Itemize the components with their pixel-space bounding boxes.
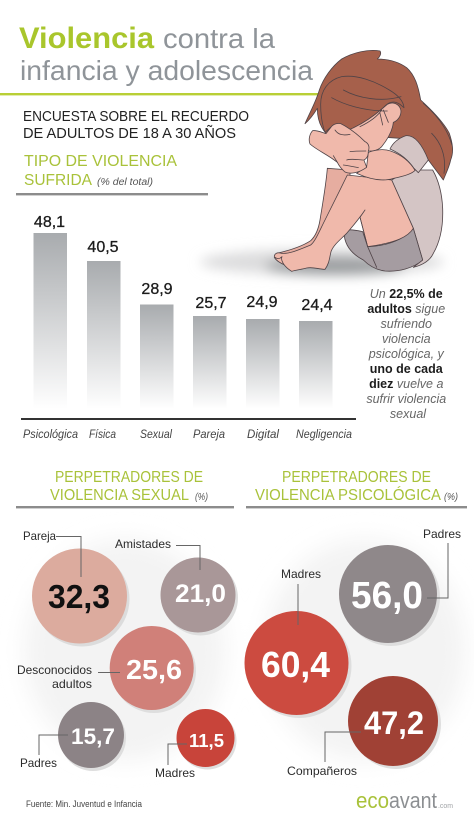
bar: Digital: Digital <box>247 427 279 441</box>
bar chart <box>23 214 352 441</box>
bar: Física: 40,5 <box>87 239 119 256</box>
bubble chart: violencia sexual <box>17 529 238 780</box>
heading: violencia sexual: PERPETRADORES DE <box>55 469 203 486</box>
callout: sufriendo <box>381 317 432 331</box>
bar: Pareja: 25,7 <box>195 295 227 312</box>
hand creases <box>333 130 366 168</box>
logo: ecoavant: avant <box>389 788 437 813</box>
title: contra la <box>163 23 275 54</box>
bar: Digital <box>246 294 280 441</box>
bubble: Madres <box>244 567 352 718</box>
title: infancia y adolescencia <box>20 55 313 86</box>
bar: Digital: 24,9 <box>246 294 278 311</box>
callout: psicológica, y <box>368 347 445 361</box>
callout: violencia <box>382 332 431 346</box>
heading: violencia sexual <box>50 469 208 504</box>
face <box>348 103 401 151</box>
bubble: Padres: 15,7 <box>71 724 115 749</box>
heading: violencia sexual: VIOLENCIA SEXUAL <box>50 487 189 504</box>
bubble: Padres <box>339 527 461 646</box>
bar: Psicológica: 48,1 <box>34 214 65 231</box>
heading: tipo de violencia: (% del total) <box>97 177 153 188</box>
bar: Negligencia: Negligencia <box>296 427 352 441</box>
bar: Física: Física <box>89 427 116 441</box>
fringe <box>321 76 404 132</box>
bubble chart: violencia psicológica <box>244 527 461 778</box>
shorts <box>344 228 423 271</box>
bar: Psicológica <box>23 214 78 441</box>
logo: ecoavant: .com <box>438 803 453 810</box>
far leg <box>277 168 350 260</box>
heading rule <box>16 506 234 508</box>
bubble: Madres: Madres <box>155 766 195 780</box>
heading: tipo de violencia: SUFRIDA <box>24 172 92 189</box>
bar: Sexual: 28,9 <box>141 281 173 298</box>
bubble: Compañeros: 47,2 <box>364 705 424 741</box>
bar: Sexual: Sexual <box>140 427 172 441</box>
callout: diez vuelve a <box>369 377 443 391</box>
hair strands <box>332 90 452 173</box>
logo: ecoavant: eco <box>356 788 389 813</box>
bubble: Pareja: Pareja <box>23 529 56 543</box>
bar: Negligencia <box>296 297 352 441</box>
soft backdrop <box>25 540 465 760</box>
lower body <box>274 168 443 271</box>
heading: tipo de violencia <box>24 153 177 189</box>
heading: violencia psicológica: VIOLENCIA PSICOLÓGICA <box>255 485 441 504</box>
title rule <box>0 93 318 95</box>
bubble: Pareja <box>23 529 130 646</box>
illustration: seated girl <box>274 50 453 271</box>
left arm and hand <box>309 123 369 173</box>
heading: violencia psicológica: PERPETRADORES DE <box>282 469 431 486</box>
hair back <box>305 50 453 180</box>
bubble: Compañeros <box>287 676 441 778</box>
bubble: Padres: 56,0 <box>351 575 423 617</box>
bubble: Desconocidos adultos: 25,6 <box>126 654 182 685</box>
bubble: Compañeros: Compañeros <box>287 764 357 778</box>
bubble: Amistades: 21,0 <box>175 580 226 608</box>
bubble: Padres: Padres <box>423 527 461 541</box>
heading: violencia psicológica: (%) <box>444 492 458 503</box>
bar: Física <box>87 239 120 441</box>
heading: violencia psicológica <box>255 469 458 504</box>
bar: Sexual <box>140 281 174 441</box>
bubble: Desconocidos adultos <box>17 626 196 713</box>
callout: sufrir violencia <box>366 392 446 406</box>
bar: Psicológica: Psicológica <box>23 427 78 441</box>
source: Fuente: Min. Juventud e Infancia <box>26 799 142 809</box>
bubble: Amistades <box>115 537 238 636</box>
floor shadow <box>200 249 444 275</box>
bar: Pareja: Pareja <box>193 427 225 441</box>
title <box>19 22 313 86</box>
right arm <box>357 150 415 180</box>
chart axis <box>21 418 356 420</box>
bubble: Desconocidos adultos: Desconocidos <box>17 663 92 677</box>
logo: ecoavant <box>356 788 453 813</box>
callout: Un 22,5% de <box>370 287 443 301</box>
bubble: Amistades: Amistades <box>115 537 171 551</box>
title: Violencia <box>19 22 154 55</box>
callout: uno de cada <box>370 362 444 376</box>
bubble: Madres: 60,4 <box>261 644 330 685</box>
bar: Pareja <box>193 295 227 441</box>
sleeve <box>390 136 428 173</box>
bubble: Padres: Padres <box>20 756 57 770</box>
heading rule <box>246 506 467 508</box>
survey subtitle: ENCUESTA SOBRE EL RECUERDO <box>23 108 249 125</box>
bar: Negligencia: 24,4 <box>301 297 333 314</box>
bubble: Madres <box>155 709 236 780</box>
shorts seam and toes <box>275 217 377 267</box>
bubble: Desconocidos adultos: adultos <box>52 677 92 691</box>
shirt body <box>392 170 443 267</box>
heading rule <box>16 193 208 195</box>
heading: tipo de violencia: TIPO DE VIOLENCIA <box>24 153 177 170</box>
bubble: Madres: 11,5 <box>189 731 224 751</box>
near leg <box>274 175 413 271</box>
bubble: Madres: Madres <box>281 567 321 581</box>
bubble: Pareja: 32,3 <box>48 578 110 615</box>
callout: adultos sigue <box>367 302 445 316</box>
survey subtitle <box>23 108 249 142</box>
callout: sexual <box>390 407 427 421</box>
survey subtitle: DE ADULTOS DE 18 A 30 AÑOS <box>23 125 236 142</box>
bubble: Padres <box>20 702 126 771</box>
heading: violencia sexual: (%) <box>195 492 208 503</box>
